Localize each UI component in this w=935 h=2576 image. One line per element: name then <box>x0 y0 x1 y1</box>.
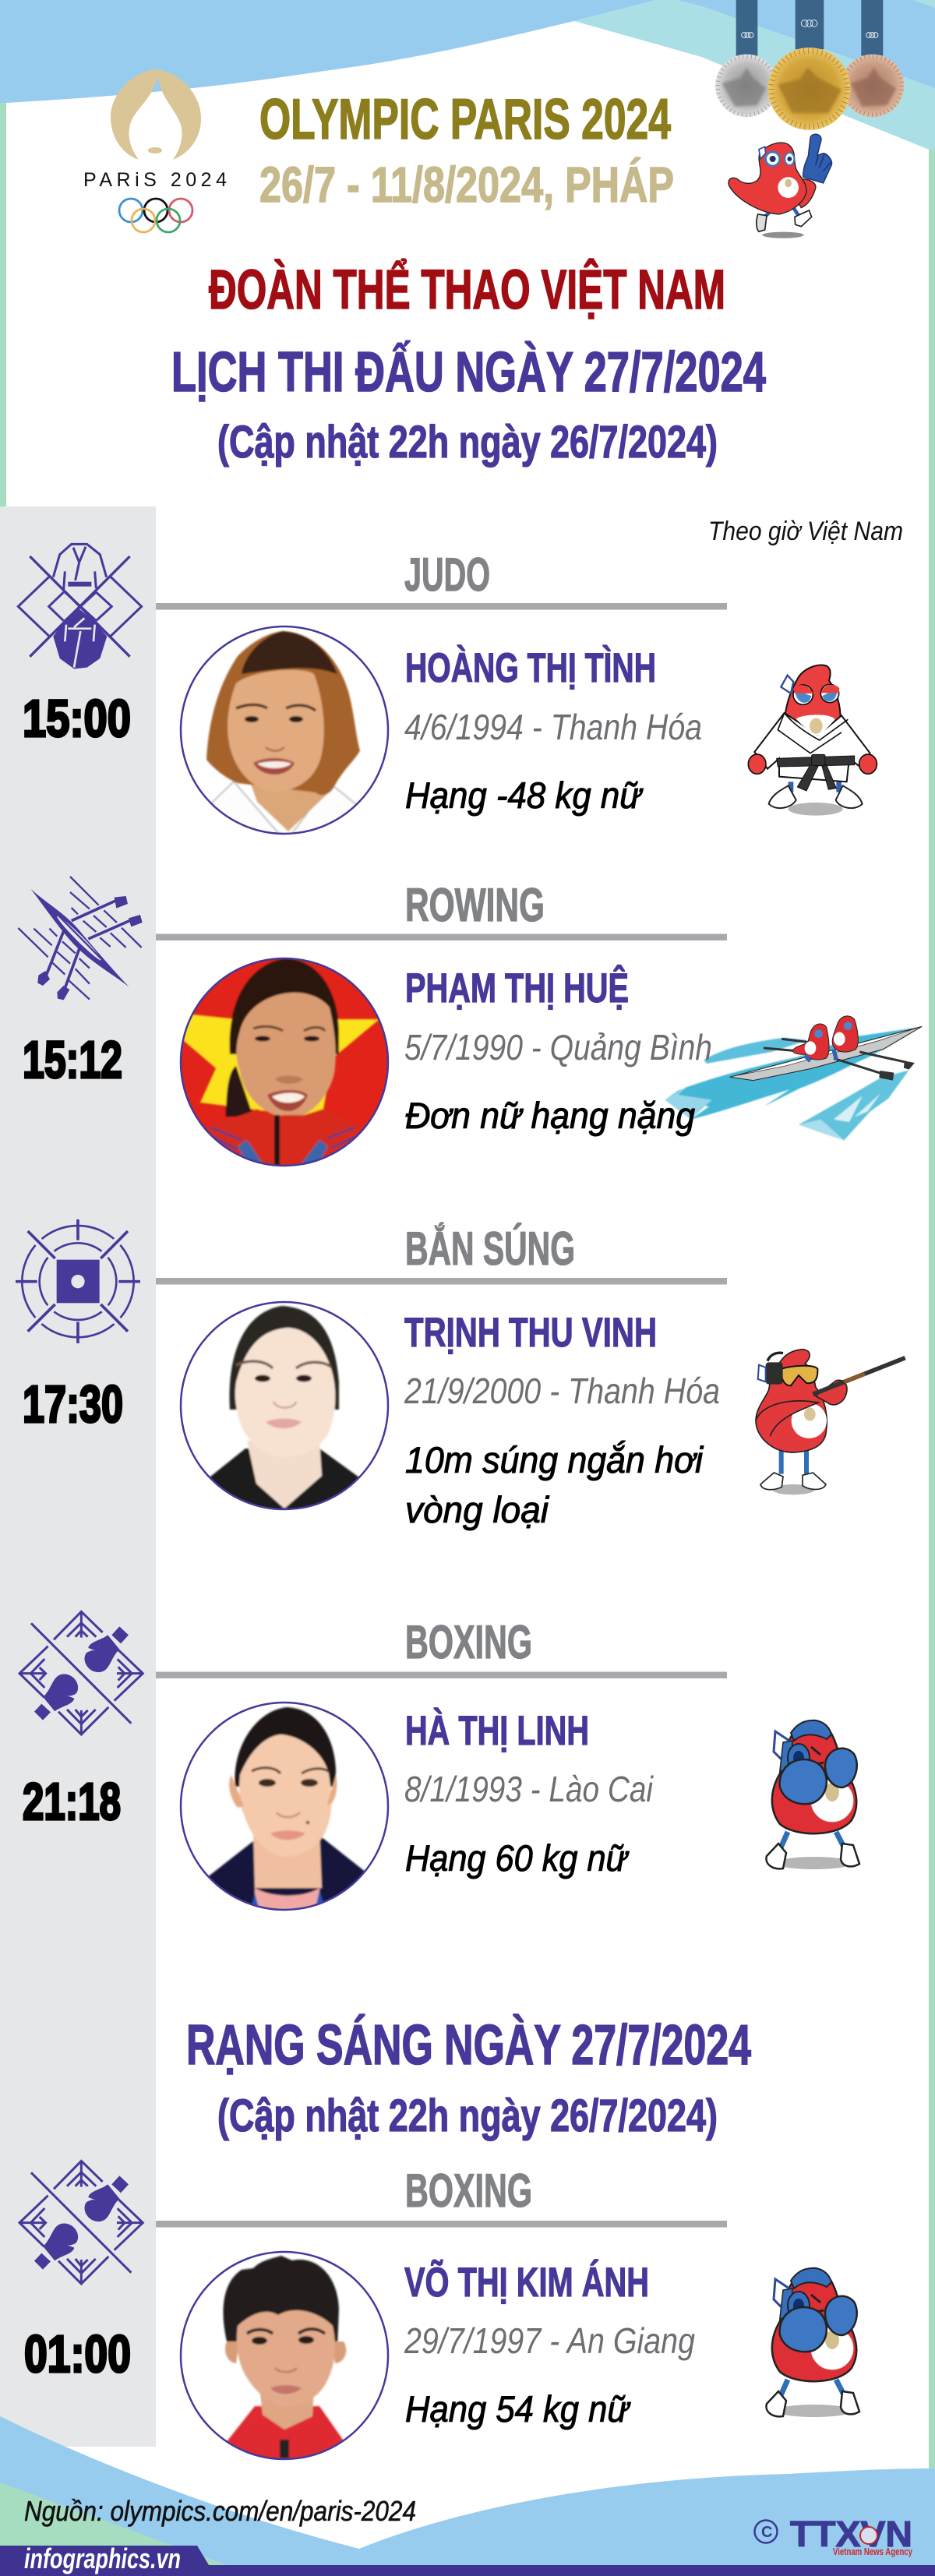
heading: update time: (Cập nhật 22h ngày 26/7/2024) <box>217 2091 718 2141</box>
athlete photo <box>181 1302 388 1515</box>
sport heading: JUDO <box>404 549 490 601</box>
panel: shooting <box>16 1219 905 1530</box>
footer wave: green <box>0 2482 227 2565</box>
divider <box>156 933 727 940</box>
divider <box>156 1278 727 1284</box>
panel: judo <box>18 544 877 839</box>
logo lips <box>148 147 162 154</box>
logo wordmark: PARiS 2024 <box>83 169 227 191</box>
birth info: 5/7/1990 - Quảng Bình <box>404 1027 712 1067</box>
silver medal <box>715 55 778 117</box>
athlete name: VÕ THỊ KIM ÁNH <box>404 2259 649 2306</box>
event category: Hạng 54 kg nữ <box>405 2388 631 2430</box>
title: Olympic Paris 2024: OLYMPIC PARIS 2024 <box>259 88 671 151</box>
icon: boxing <box>19 2161 143 2284</box>
logo flame <box>111 69 201 160</box>
subtitle: dates: 26/7 - 11/8/2024, PHÁP <box>259 157 674 213</box>
athlete name: TRỊNH THU VINH <box>404 1310 657 1356</box>
logo: TTXVN: C <box>761 2524 772 2541</box>
medal ribbons <box>736 0 883 56</box>
sport heading: ROWING <box>405 879 545 931</box>
source note: Nguồn: olympics.com/en/paris-2024 <box>24 2495 416 2527</box>
time: 17:30 <box>23 1375 123 1434</box>
logo: TTXVN <box>754 2514 913 2557</box>
divider <box>156 1672 727 1678</box>
birth info: 8/1/1993 - Lào Cai <box>404 1769 654 1809</box>
header background: blue wave <box>0 0 935 103</box>
event category, line 1: 10m súng ngắn hơi <box>405 1439 704 1480</box>
icon: judo <box>18 544 142 669</box>
note: Vietnam time: Theo giờ Việt Nam <box>708 517 903 546</box>
logo: TTXVN: TTXVN <box>790 2514 912 2554</box>
birth info: 29/7/1997 - An Giang <box>404 2320 695 2361</box>
sport heading: BẮN SÚNG <box>405 1223 575 1275</box>
icon: shooting target <box>16 1219 140 1343</box>
event category: Đơn nữ hạng nặng <box>405 1095 695 1136</box>
event category: Hạng 60 kg nữ <box>405 1837 630 1879</box>
medals <box>715 0 904 130</box>
mascot: shooting <box>756 1350 905 1494</box>
icon: rowing <box>18 877 143 1000</box>
athlete name: PHẠM THỊ HUỆ <box>405 964 629 1011</box>
athlete name: HÀ THỊ LINH <box>405 1707 589 1754</box>
ribbon rings <box>742 20 878 37</box>
mascot: running, finger up <box>729 134 832 238</box>
mascot: judo <box>748 665 877 816</box>
sport heading: BOXING <box>405 1616 532 1668</box>
athlete name: HOÀNG THỊ TÌNH <box>405 644 656 691</box>
heading: delegation: ĐOÀN THỂ THAO VIỆT NAM <box>209 259 725 321</box>
icon: boxing <box>19 1611 143 1734</box>
divider <box>156 603 727 609</box>
panel: boxing Võ Thị Kim Ánh <box>19 2161 859 2465</box>
sport heading: BOXING <box>405 2165 532 2217</box>
event category: Hạng -48 kg nữ <box>405 775 644 816</box>
footer wave: blue <box>0 2416 935 2571</box>
header background: teal wave <box>574 0 935 152</box>
divider <box>156 2221 727 2227</box>
footer tab: infographics.vn: infographics.vn <box>24 2542 181 2574</box>
time: 01:00 <box>24 2325 131 2384</box>
right green strip <box>929 150 935 2472</box>
athlete photo <box>181 958 388 1171</box>
time column panel <box>0 506 156 2447</box>
bronze medal <box>842 55 904 117</box>
time: 15:12 <box>23 1031 122 1089</box>
mascot: boxing <box>766 1720 859 1869</box>
birth info: 21/9/2000 - Thanh Hóa <box>404 1371 720 1411</box>
mascot: rowing boat <box>665 1016 922 1140</box>
heading: update time: (Cập nhật 22h ngày 26/7/2024) <box>217 417 718 468</box>
left green strip <box>0 103 6 506</box>
header corner accent <box>913 0 935 8</box>
gold medal <box>768 48 851 130</box>
birth info: 4/6/1994 - Thanh Hóa <box>404 707 702 747</box>
footer bar <box>0 2565 935 2576</box>
Olympic rings <box>119 199 192 232</box>
time: 21:18 <box>23 1773 121 1831</box>
logo: Paris 2024 <box>83 69 227 232</box>
athlete photo <box>181 1703 388 1915</box>
time: 15:00 <box>23 690 131 748</box>
panel: boxing Hà Thị Linh <box>19 1611 859 1915</box>
panel: rowing <box>18 877 922 1171</box>
athlete photo <box>181 2252 388 2465</box>
athlete photo <box>181 626 388 839</box>
event category, line 2: vòng loại <box>405 1489 550 1530</box>
mascot: boxing <box>766 2268 859 2417</box>
